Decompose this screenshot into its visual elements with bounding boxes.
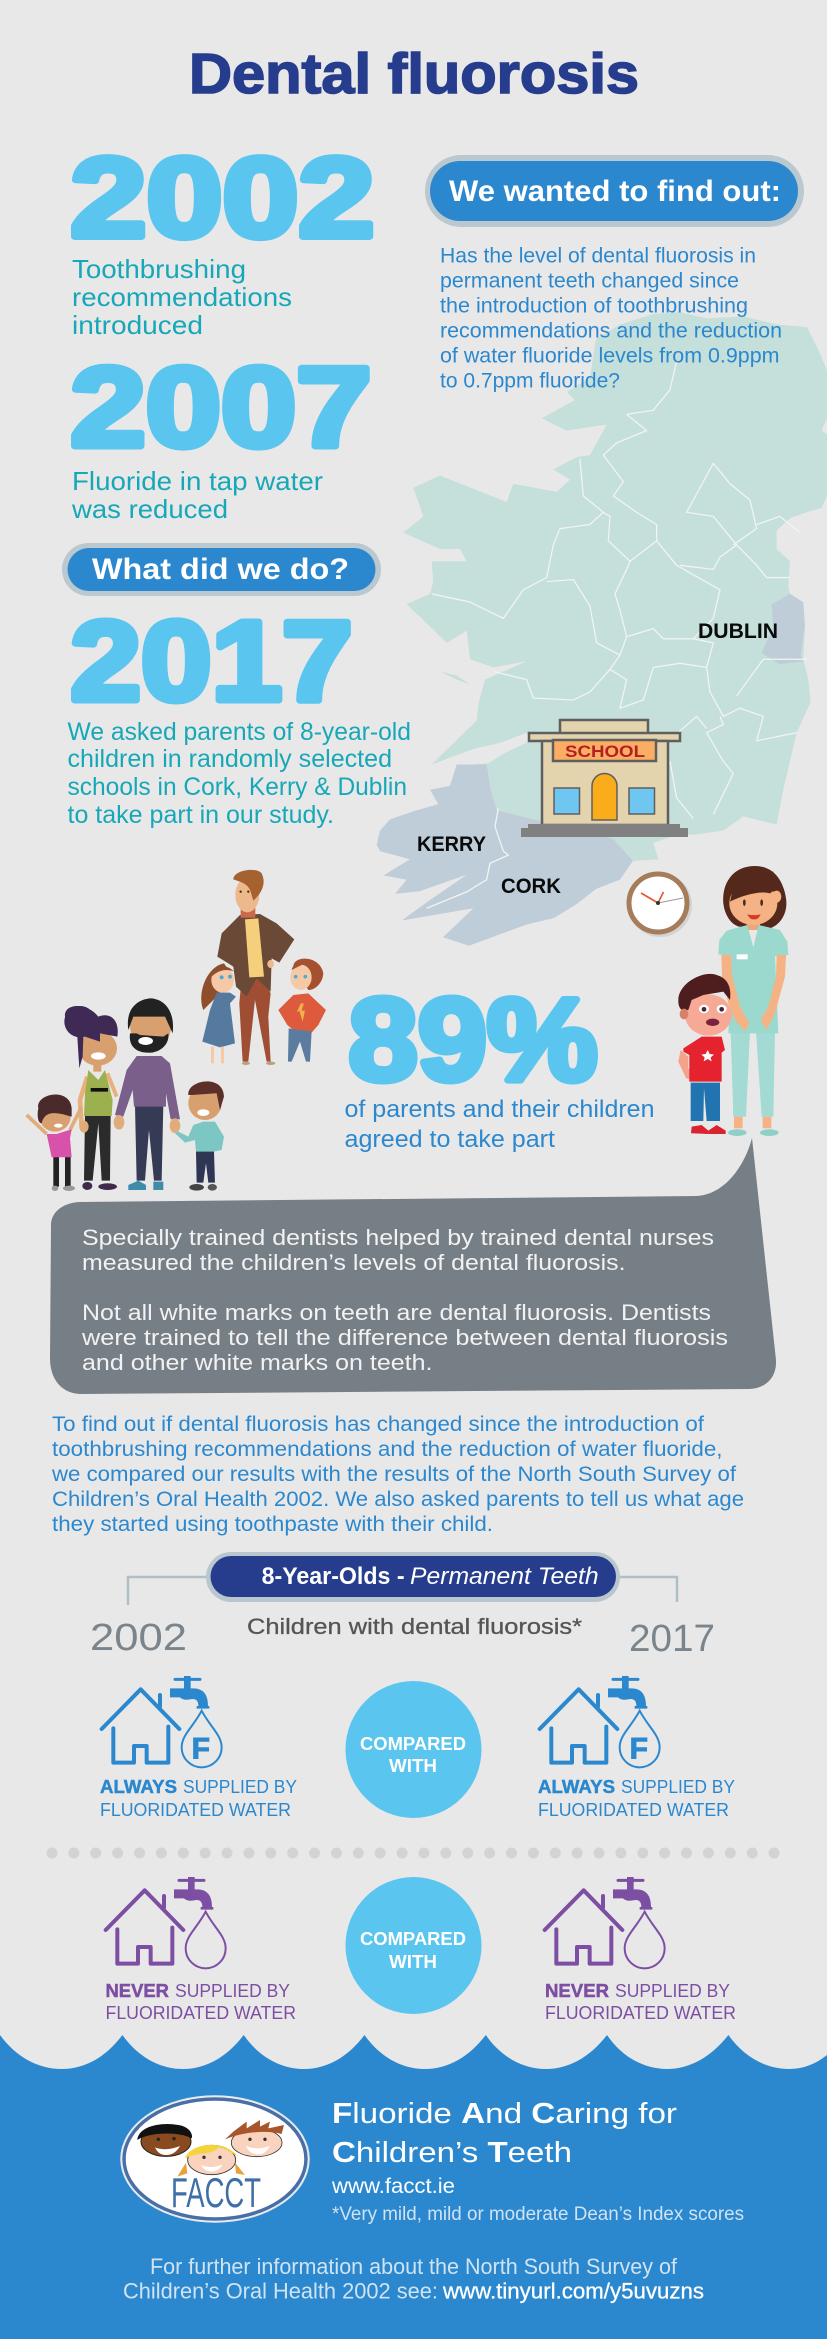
text: parents and children agreed: agreed to take part bbox=[344, 1126, 555, 1153]
year label 2017: 2017 bbox=[629, 1618, 715, 1660]
text: toothbrushing recommendations: Toothbrushing bbox=[72, 254, 246, 284]
text: further information bbox=[123, 2254, 704, 2304]
text: FACCT name: Children’s Teeth bbox=[332, 2137, 572, 2169]
text: parents and children agreed: of parents and their children bbox=[344, 1096, 654, 1123]
logo: FACCT: FACCT bbox=[171, 2169, 261, 2216]
illustration: nurse and boy bbox=[678, 866, 788, 1136]
callout: dentists speech bubble: Not all white marks on teeth are dental fluorosis. Dentists bbox=[82, 1300, 711, 1325]
circle: compared with (non-fluoridated): WITH bbox=[389, 1952, 437, 1972]
text: comparison method: we compared our results with the results of the North South Survey of bbox=[51, 1463, 736, 1486]
heading pill: we wanted to find out bbox=[425, 155, 804, 227]
heading pill: we wanted to find out: We wanted to find out: bbox=[449, 175, 781, 208]
circle: compared with (fluoridated): COMPARED bbox=[360, 1734, 466, 1754]
text: never supplied (2002): NEVER bbox=[106, 1980, 169, 2001]
text: we asked parents: children in randomly selected bbox=[68, 745, 392, 773]
logo: FACCT bbox=[121, 2096, 309, 2222]
text: always supplied (2017): SUPPLIED BY bbox=[621, 1776, 735, 1797]
icon: house, tap, fluoride drop (2017) bbox=[540, 1676, 660, 1767]
text: research question: of water fluoride levels from 0.9ppm bbox=[440, 344, 780, 368]
callout: dentists speech bubble bbox=[50, 1138, 776, 1394]
text: never supplied (2017) bbox=[545, 1980, 736, 2023]
statistic: 89%: 89% bbox=[348, 974, 598, 1105]
icon: house, tap, fluoride drop (2002): F bbox=[192, 1732, 210, 1765]
text: research question bbox=[440, 244, 782, 392]
text: toothbrushing recommendations bbox=[72, 254, 292, 340]
text: we asked parents: We asked parents of 8-year-old bbox=[68, 718, 411, 746]
text: never supplied (2002): FLUORIDATED WATER bbox=[106, 2002, 296, 2023]
text: fluoride reduced bbox=[71, 466, 323, 524]
text: research question: permanent teeth changed since bbox=[440, 270, 739, 292]
icon: house, tap, plain drop (2002) bbox=[106, 1877, 226, 1968]
year 2017: 2017 bbox=[70, 598, 352, 724]
text: always supplied (2017) bbox=[538, 1776, 735, 1820]
logo: girl face, blonde bbox=[177, 2145, 245, 2177]
text: comparison method: they started using toothpaste with their child. bbox=[52, 1513, 493, 1536]
illustration: father with two children bbox=[201, 870, 326, 1065]
heading pill: 8-year-olds permanent teeth: Permanent Teeth bbox=[410, 1563, 599, 1590]
text: research question: Has the level of dental fluorosis in bbox=[440, 244, 756, 268]
circle: compared with (non-fluoridated): COMPARED bbox=[360, 1929, 466, 1949]
text: footnote: *Very mild, mild or moderate Dean’s Index scores bbox=[332, 2204, 744, 2225]
callout: dentists speech bubble: Specially trained dentists helped by trained dental nurses bbox=[82, 1225, 714, 1250]
text: parents and children agreed bbox=[344, 1096, 654, 1153]
text: further information: For further information about the North South Survey of bbox=[150, 2254, 678, 2279]
text: FACCT name: Fluoride And Caring for bbox=[332, 2098, 677, 2130]
map: land bbox=[403, 312, 827, 861]
text: comparison method: To find out if dental fluorosis has changed since the introduction of bbox=[52, 1413, 704, 1436]
callout: dentists speech bubble: were trained to tell the difference between dental fluorosis bbox=[81, 1325, 728, 1350]
callout: dentists speech bubble: and other white marks on teeth. bbox=[82, 1350, 432, 1375]
map label: Kerry: KERRY bbox=[417, 833, 486, 856]
heading pill: 8-year-olds permanent teeth: 8-Year-Olds - bbox=[262, 1563, 405, 1590]
title: Dental fluorosis bbox=[189, 42, 639, 106]
callout: dentists speech bubble: measured the children’s levels of dental fluorosis. bbox=[82, 1250, 626, 1275]
logo: boy face, dark bbox=[137, 2124, 192, 2156]
logo: boy face, red hair bbox=[225, 2120, 284, 2157]
text: never supplied (2017): NEVER bbox=[545, 1980, 609, 2001]
text: we asked parents bbox=[68, 718, 411, 829]
text: fluoride reduced: Fluoride in tap water bbox=[72, 466, 323, 496]
connector lines to years bbox=[128, 1577, 677, 1605]
map label: Cork: CORK bbox=[501, 875, 561, 898]
dotted divider bbox=[52, 1848, 775, 1858]
text: we asked parents: schools in Cork, Kerry & Dublin bbox=[68, 773, 407, 801]
subheading: children with dental fluorosis: Children with dental fluorosis* bbox=[247, 1614, 582, 1639]
text: always supplied (2002) bbox=[100, 1776, 297, 1820]
text: always supplied (2017): FLUORIDATED WATER bbox=[538, 1799, 729, 1820]
circle: compared with (non-fluoridated) bbox=[346, 1877, 482, 2014]
text: FACCT name bbox=[332, 2098, 677, 2169]
icon: school bbox=[521, 720, 688, 837]
map label: Dublin: DUBLIN bbox=[698, 620, 778, 643]
heading pill: what did we do: What did we do? bbox=[92, 553, 349, 586]
text: never supplied (2017): FLUORIDATED WATER bbox=[545, 2002, 736, 2023]
text: comparison method bbox=[51, 1413, 744, 1536]
text: never supplied (2002) bbox=[106, 1980, 296, 2023]
year 2002: 2002 bbox=[70, 134, 374, 260]
text: we asked parents: to take part in our study. bbox=[68, 801, 334, 829]
text: never supplied (2002): SUPPLIED BY bbox=[175, 1980, 290, 2001]
text: always supplied (2002): SUPPLIED BY bbox=[183, 1776, 297, 1797]
icon: house, tap, fluoride drop (2002) bbox=[102, 1676, 222, 1767]
footer: scalloped blue panel bbox=[0, 2035, 827, 2339]
icon: school: SCHOOL bbox=[565, 742, 645, 761]
illustration: family of four bbox=[27, 998, 224, 1191]
text: research question: to 0.7ppm fluoride? bbox=[440, 370, 620, 392]
text: toothbrushing recommendations: introduced bbox=[72, 310, 203, 340]
text: further information: www.tinyurl.com/y5uvuzns bbox=[442, 2278, 704, 2304]
year label 2002: 2002 bbox=[90, 1617, 187, 1659]
icon: clock bbox=[628, 873, 692, 937]
heading pill: what did we do bbox=[62, 543, 381, 596]
map: Kerry and Cork bbox=[377, 765, 633, 946]
text: comparison method: Children’s Oral Health 2002. We also asked parents to tell us what age bbox=[52, 1488, 744, 1511]
text: always supplied (2017): ALWAYS bbox=[538, 1776, 615, 1797]
icon: house, tap, fluoride drop (2017): F bbox=[630, 1732, 648, 1765]
text: research question: the introduction of toothbrushing bbox=[440, 294, 748, 318]
text: toothbrushing recommendations: recommendations bbox=[72, 282, 292, 312]
year 2007: 2007 bbox=[70, 344, 372, 470]
text: always supplied (2002): FLUORIDATED WATER bbox=[100, 1799, 291, 1820]
text: website: www.facct.ie bbox=[331, 2175, 455, 2198]
heading pill: 8-year-olds permanent teeth bbox=[206, 1552, 620, 1602]
icon: house, tap, plain drop (2017) bbox=[545, 1877, 665, 1968]
text: further information: Children’s Oral Health 2002 see: bbox=[123, 2278, 438, 2304]
map of Ireland bbox=[377, 312, 827, 946]
text: always supplied (2002): ALWAYS bbox=[100, 1776, 177, 1797]
text: comparison method: toothbrushing recommendations and the reduction of water fluoride, bbox=[52, 1438, 722, 1461]
text: fluoride reduced: was reduced bbox=[71, 494, 228, 524]
circle: compared with (fluoridated) bbox=[346, 1681, 482, 1818]
text: research question: recommendations and the reduction bbox=[440, 320, 782, 342]
circle: compared with (fluoridated): WITH bbox=[389, 1756, 437, 1776]
text: never supplied (2017): SUPPLIED BY bbox=[615, 1980, 730, 2001]
map: Dublin bbox=[762, 594, 805, 664]
